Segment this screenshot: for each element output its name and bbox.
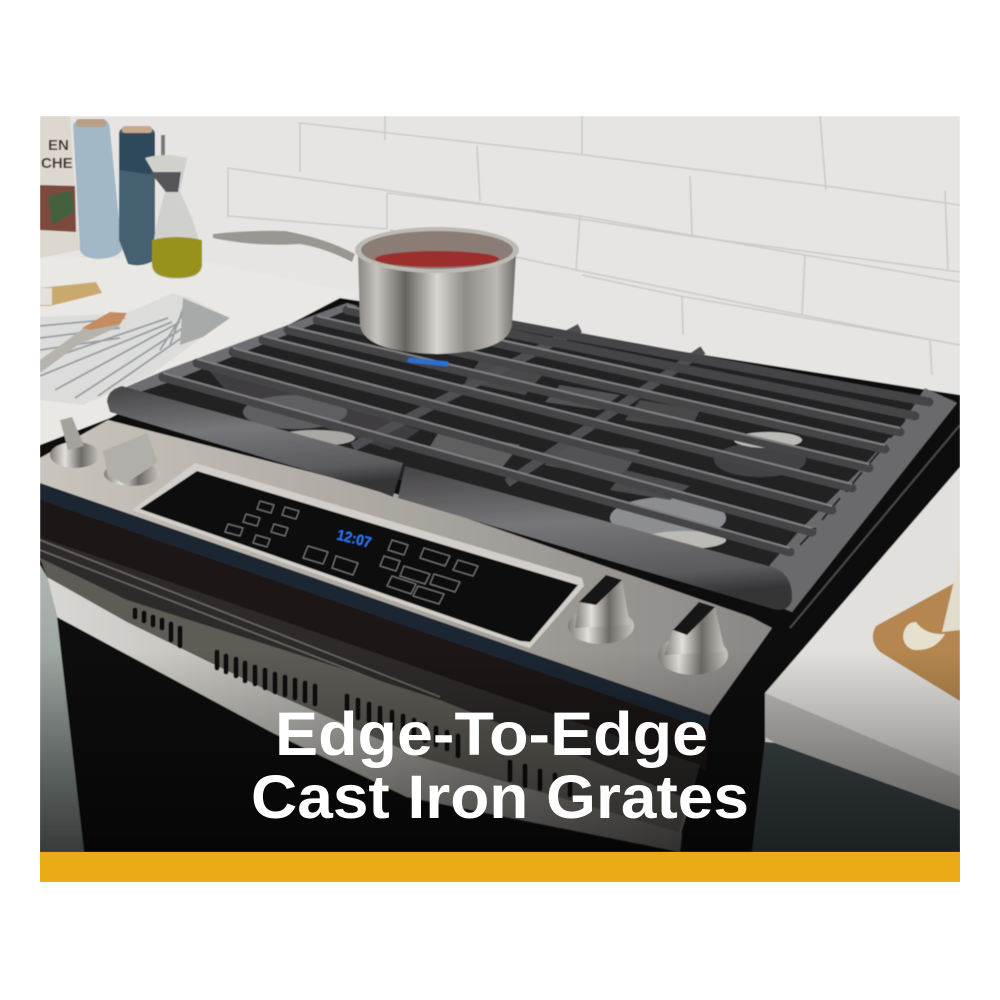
saucepan xyxy=(213,227,519,364)
oil bottle xyxy=(145,135,202,279)
tiled wall xyxy=(50,116,960,442)
range body and door xyxy=(40,483,772,852)
cookbook: EN xyxy=(48,137,69,154)
vent slots xyxy=(135,610,570,795)
photo: gas range in kitchen xyxy=(40,116,960,852)
cutting board with garlic xyxy=(873,555,960,701)
control knobs xyxy=(50,417,728,675)
bread board and towel with spatula xyxy=(40,282,230,405)
vent panel xyxy=(40,558,690,833)
cookbook: CHE xyxy=(41,155,73,172)
finger bars xyxy=(163,303,929,552)
stainless control panel xyxy=(40,420,772,715)
right counter and cabinet xyxy=(745,460,960,852)
cookbook xyxy=(40,116,80,258)
door trim strip xyxy=(40,537,700,800)
left countertop xyxy=(60,309,322,439)
black band under control panel xyxy=(40,483,710,770)
thick front bar left xyxy=(107,386,403,497)
title: Cast Iron Grates xyxy=(251,763,749,831)
bottom dark gradient overlay xyxy=(40,650,960,852)
thick front bar right xyxy=(398,466,792,610)
grate interior xyxy=(141,312,955,566)
cast iron grates xyxy=(107,303,957,612)
cross bars xyxy=(353,328,703,483)
scalloped left edge xyxy=(112,303,358,396)
oven door handle xyxy=(47,577,682,852)
left lower cabinet xyxy=(40,565,84,852)
grinders xyxy=(73,119,155,265)
cooktop black base and side trim xyxy=(40,298,960,852)
right curved end wall xyxy=(762,388,957,612)
clock display: 12:07 xyxy=(335,527,373,552)
title: Edge-To-Edge xyxy=(275,700,708,768)
lower door line xyxy=(680,800,690,833)
title xyxy=(251,700,749,831)
glass touch panel xyxy=(132,463,584,648)
yellow footer bar xyxy=(40,852,960,882)
burner and plate highlights xyxy=(200,360,806,549)
